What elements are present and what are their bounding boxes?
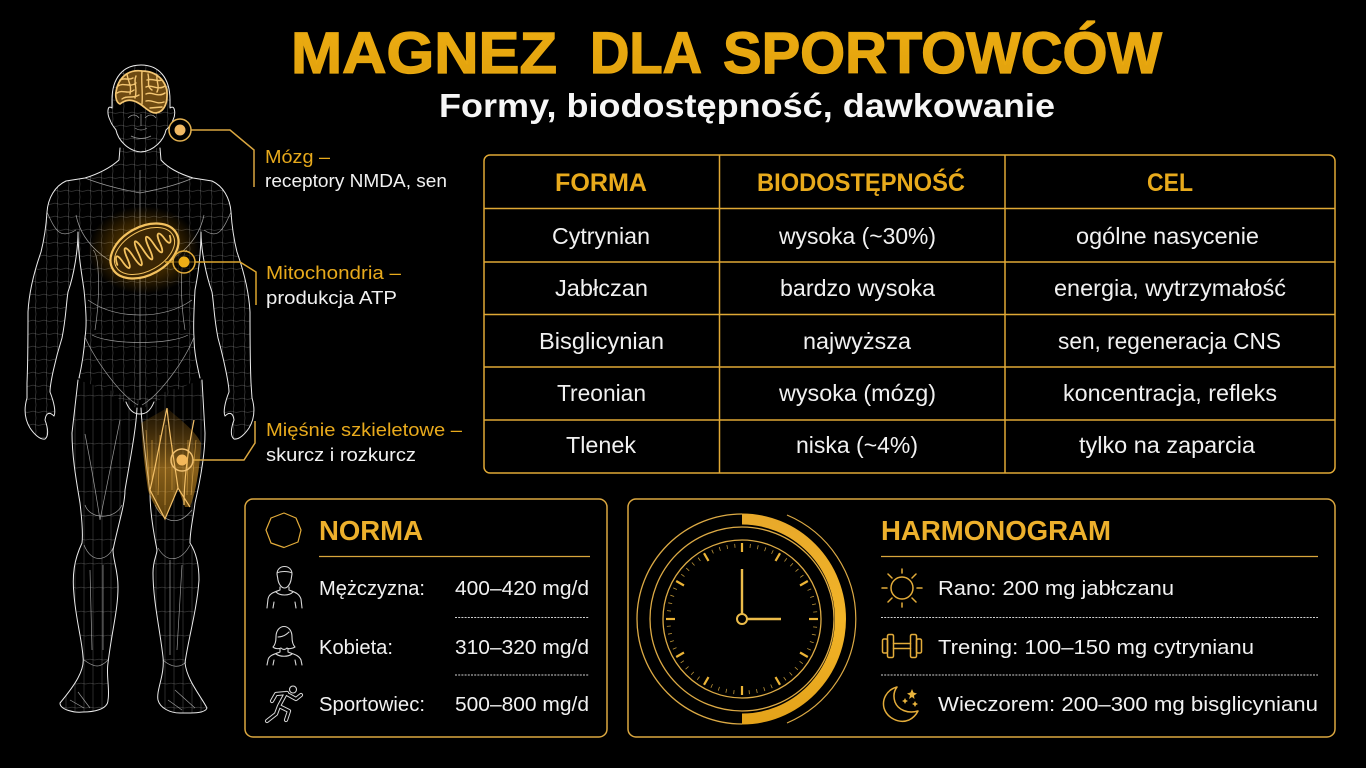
row: Bisglicynian: [539, 328, 1281, 354]
row: mężczyzna: 400–420 mg/d: [455, 577, 589, 600]
callout: mitochondria: [165, 251, 402, 308]
icon: woman: [267, 626, 302, 665]
row: Bisglicynian: Bisglicynian: [539, 328, 664, 354]
row: Treonian: [557, 380, 1277, 406]
row: Cytrynian: ogólne nasycenie: [1076, 223, 1259, 249]
row: Bisglicynian: sen, regeneracja CNS: [1058, 328, 1281, 354]
heading: harmonogram: HARMONOGRAM: [881, 515, 1111, 546]
callout: mitochondria: produkcja ATP: [266, 287, 397, 308]
title: [291, 21, 1162, 86]
row: Cytrynian: Cytrynian: [552, 223, 650, 249]
title: SPORTOWCÓW: [723, 21, 1162, 86]
body: pelvis detail: [126, 402, 154, 414]
table header: [555, 167, 1193, 197]
body: left arm and torso outline: [25, 148, 120, 439]
icon: man: [267, 566, 302, 608]
row: Tlenek: Tlenek: [566, 432, 636, 458]
row: wieczorem: Wieczorem: 200–300 mg bisglicynianu: [938, 693, 1318, 716]
title: DLA: [590, 21, 702, 86]
callout: skeletal muscles: Mięśnie szkieletowe –: [266, 419, 463, 440]
row: Cytrynian: wysoka (~30%): [778, 223, 936, 249]
row: rano: Rano: 200 mg jabłczanu: [938, 577, 1174, 600]
row: Treonian: wysoka (mózg): [778, 380, 936, 406]
row: Bisglicynian: najwyższa: [803, 328, 911, 354]
icon: dumbbell: [882, 634, 922, 658]
table header: BIODOSTĘPNOŚĆ: [757, 167, 965, 197]
row: sportowiec: Sportowiec:: [319, 693, 425, 716]
callout: mitochondria: Mitochondria –: [266, 262, 402, 283]
table header: FORMA: [555, 169, 647, 197]
callout: skeletal muscles: [171, 419, 463, 471]
body: muscle contour lines: [47, 114, 231, 710]
row: kobieta: 310–320 mg/d: [455, 636, 589, 659]
muscle highlight: thigh: [141, 408, 201, 519]
table: forms of magnesium: [484, 155, 1335, 473]
row: mężczyzna: Mężczyzna:: [319, 577, 425, 600]
panel: norma: [245, 499, 607, 737]
row: Tlenek: [566, 432, 1255, 458]
callout: brain: Mózg –: [265, 146, 331, 167]
subtitle: Formy, biodostępność, dawkowanie: [439, 87, 1055, 124]
callout: brain: receptory NMDA, sen: [265, 170, 447, 191]
row: sportowiec: [319, 693, 589, 716]
title: MAGNEZ: [291, 21, 557, 86]
row: Jabłczan: bardzo wysoka: [780, 275, 935, 301]
clock: [637, 514, 856, 724]
row: Jabłczan: [555, 275, 1286, 301]
row: mężczyzna: [319, 577, 589, 600]
heading: norma: NORMA: [319, 515, 423, 546]
callout: skeletal muscles: skurcz i rozkurcz: [266, 444, 416, 465]
table grid: [484, 155, 1335, 473]
body: right arm and torso outline: [160, 148, 254, 439]
row: trening: Trening: 100–150 mg cytrynianu: [938, 636, 1254, 659]
callout: brain: [169, 119, 447, 191]
mitochondrion highlight: [88, 206, 200, 294]
body: grid fill: [25, 65, 254, 713]
row: Jabłczan: energia, wytrzymałość: [1054, 275, 1286, 301]
row: Tlenek: tylko na zaparcia: [1079, 432, 1255, 458]
row: kobieta: Kobieta:: [319, 636, 393, 659]
table header: CEL: [1147, 169, 1193, 197]
row: Treonian: Treonian: [557, 380, 646, 406]
row: sportowiec: 500–800 mg/d: [455, 693, 589, 716]
row: Tlenek: niska (~4%): [796, 432, 918, 458]
icon: polygon: [266, 513, 301, 548]
body: right leg outline: [141, 380, 207, 713]
brain highlight: [116, 71, 167, 113]
body: left leg outline: [60, 380, 137, 712]
row: Cytrynian: [552, 223, 1259, 249]
row: Treonian: koncentracja, refleks: [1063, 380, 1277, 406]
body: head outline: [108, 65, 175, 152]
row: kobieta: [319, 636, 589, 659]
row: Jabłczan: Jabłczan: [555, 275, 648, 301]
icon: sun: [882, 569, 922, 607]
icon: runner: [267, 686, 301, 721]
wireframe human body illustration: [25, 65, 254, 713]
icon: moon and stars: [884, 687, 918, 721]
panel: harmonogram: [628, 499, 1335, 737]
